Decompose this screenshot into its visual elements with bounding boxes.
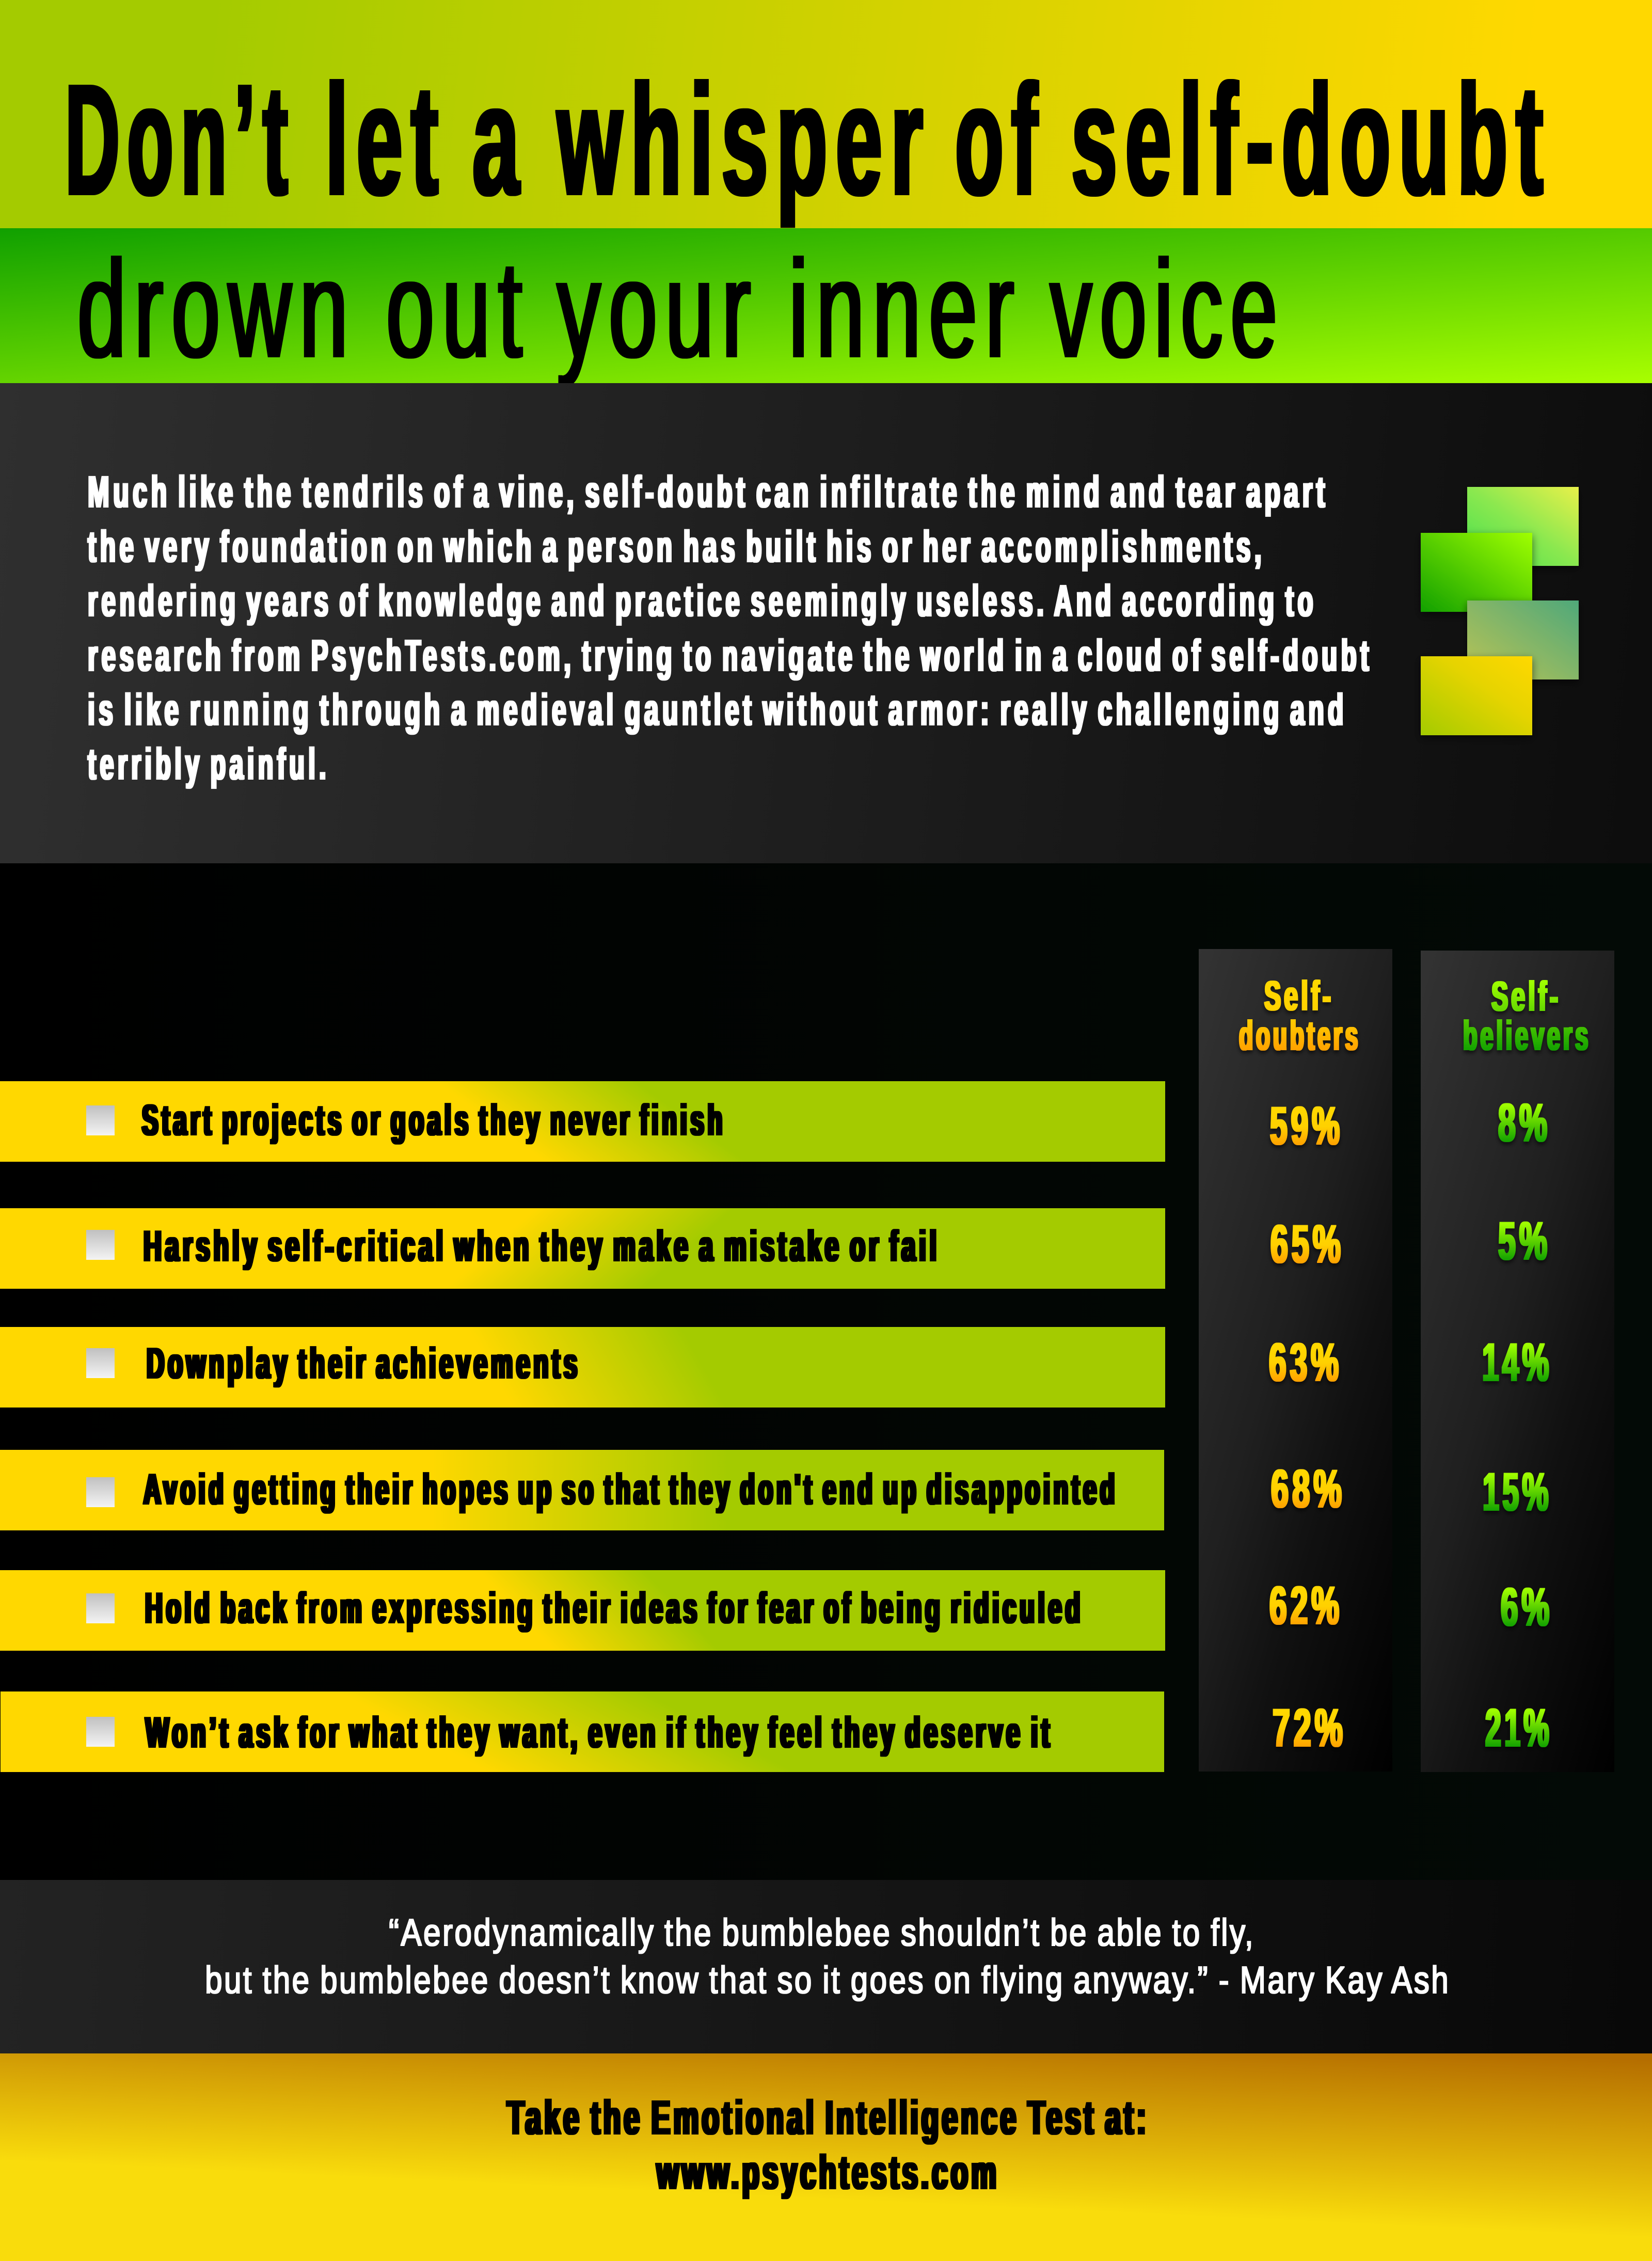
values: self-doubters: 59% (1270, 1096, 1343, 1156)
title line 2: voice (1050, 231, 1285, 387)
title line 1 (65, 52, 1551, 229)
row 1 label: Start projects or goals they never finish (142, 1096, 726, 1144)
row 5: hold back (0, 1570, 1165, 1651)
values: self-believers: 5% (1498, 1211, 1551, 1271)
values: self-doubters: 72% (1273, 1698, 1346, 1758)
call to action text (507, 2091, 1149, 2199)
row 3 checkbox (86, 1348, 115, 1378)
row 3 label: Downplay their achievements (147, 1339, 581, 1387)
call to action text: www.psychtests.com (656, 2145, 999, 2199)
row 2: harshly self-critical (0, 1208, 1165, 1289)
title line 2: your (557, 231, 759, 387)
panel: introduction (0, 383, 1652, 863)
row 2 label: Harshly self-critical when they make a mistake or fail (144, 1222, 940, 1270)
row 4: avoid getting hopes up (0, 1450, 1164, 1530)
column heading: self-doubters: Self- (1264, 973, 1334, 1019)
values: self-believers (1482, 1093, 1553, 1758)
column: self-believers (1421, 951, 1614, 1772)
row 1: start projects (0, 1081, 1165, 1162)
values: self-believers: 15% (1483, 1462, 1552, 1522)
quote text: “Aerodynamically the bumblebee shouldn’t be able to fly, (389, 1911, 1255, 1954)
call to action text: Take the Emotional Intelligence Test at: (507, 2091, 1149, 2144)
title line 1: of (955, 52, 1045, 228)
column heading: self-doubters: doubters (1239, 1013, 1361, 1058)
row 1 checkbox (86, 1105, 115, 1135)
values: self-doubters (1269, 1096, 1346, 1758)
column heading: self-believers: Self- (1491, 973, 1561, 1019)
title line 1: let (325, 52, 447, 228)
title band: first line (0, 0, 1652, 229)
title line 1: a (472, 52, 528, 228)
column heading: self-believers (1463, 973, 1591, 1058)
values: self-doubters: 65% (1270, 1214, 1344, 1274)
values: self-believers: 8% (1498, 1093, 1551, 1153)
title band: second line (0, 228, 1652, 387)
panel: quote (0, 1880, 1652, 2053)
row 5 checkbox (86, 1593, 115, 1623)
row 6 checkbox (86, 1717, 115, 1747)
title line 2: out (386, 231, 530, 387)
row 2 checkbox (86, 1230, 115, 1260)
quote text (205, 1911, 1450, 2001)
values: self-doubters: 68% (1271, 1459, 1345, 1519)
values: self-doubters: 62% (1269, 1576, 1343, 1636)
row 4 checkbox (86, 1477, 115, 1507)
title line 2: drown (77, 231, 356, 387)
row 3: downplay (0, 1327, 1165, 1408)
icon: stacked gradient rectangles (1421, 487, 1579, 735)
intro paragraph: terribly painful. (88, 739, 330, 789)
column: self-doubters (1199, 949, 1392, 1772)
title line 1: Don’t (65, 52, 295, 228)
values: self-believers: 6% (1501, 1577, 1553, 1637)
values: self-believers: 14% (1482, 1333, 1552, 1393)
panel: call to action (0, 2053, 1652, 2261)
title line 2 (77, 231, 1285, 387)
title line 1: whisper (555, 52, 931, 229)
column heading: self-doubters (1239, 973, 1361, 1058)
values: self-doubters: 63% (1269, 1333, 1342, 1393)
values: self-believers: 21% (1485, 1698, 1552, 1758)
intro paragraph (88, 467, 1373, 789)
title line 2: inner (789, 231, 1022, 387)
row 6: won't ask (1, 1691, 1164, 1772)
